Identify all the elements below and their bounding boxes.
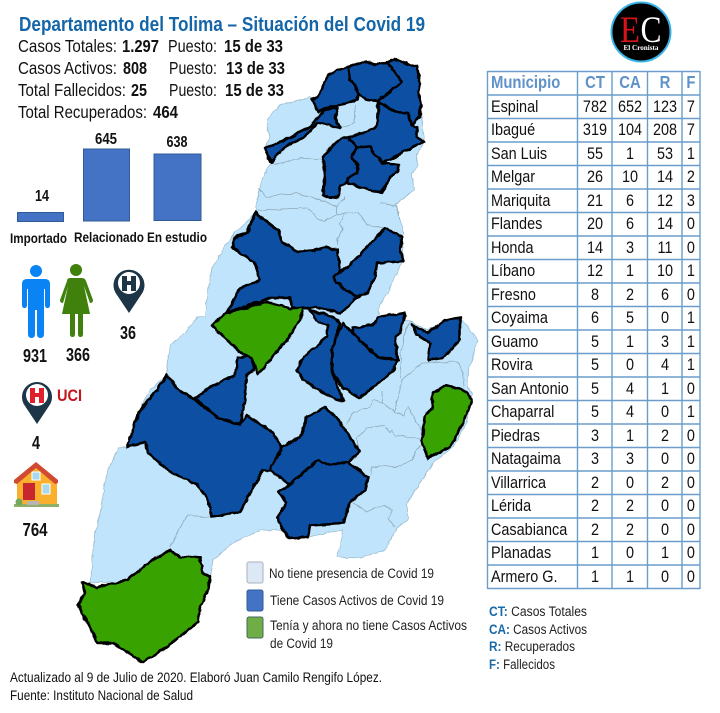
map of Tolima [78, 59, 478, 662]
district: east small [413, 317, 460, 360]
district: green east [422, 385, 472, 458]
table header: CA [619, 73, 641, 92]
table rows: 12 [587, 262, 603, 280]
table abbreviations key: R: Recuperados [489, 639, 575, 654]
table rows: 53 [657, 145, 673, 163]
table rows: 0 [687, 380, 695, 398]
table rows: 0 [687, 521, 695, 539]
table rows: 5 [591, 380, 599, 398]
table rows: Flandes [491, 215, 542, 233]
table rows: 7 [687, 121, 695, 139]
count: home care: 764 [22, 520, 48, 540]
table rows: Lérida [491, 497, 531, 515]
table rows: Melgar [491, 168, 535, 186]
table rows: 21 [587, 192, 603, 210]
summary statistics: Total Fallecidos: [18, 80, 126, 100]
footer credits [10, 670, 382, 703]
table rows: 0 [661, 450, 669, 468]
table rows: Rovira [491, 356, 533, 374]
table rows: 0 [626, 356, 634, 374]
summary statistics: Total Recuperados: [18, 102, 147, 122]
table rows: 7 [687, 98, 695, 116]
footer credits: Fuente: Instituto Nacional de Salud [10, 688, 193, 703]
table rows: Honda [491, 239, 534, 257]
district: north centre [348, 62, 402, 101]
table rows: 0 [687, 568, 695, 586]
table rows: Coyaima [491, 309, 548, 327]
table abbreviations key: CT: Casos Totales [489, 604, 587, 619]
table rows: Mariquita [491, 192, 551, 210]
summary statistics: Puesto: [169, 58, 217, 78]
table rows: 5 [591, 403, 599, 421]
table rows: 0 [661, 568, 669, 586]
table rows: 1 [626, 427, 634, 445]
table rows: 2 [687, 168, 695, 186]
table rows: 0 [687, 450, 695, 468]
map legend: de Covid 19 [270, 636, 333, 651]
bar chart: origin of cases: En estudio [147, 230, 207, 245]
table abbreviations key [489, 604, 587, 672]
count: UCI: 4 [32, 433, 40, 453]
table rows: 2 [626, 286, 634, 304]
table rows: Líbano [491, 262, 535, 280]
bar chart: origin of cases [10, 131, 207, 246]
table rows: 20 [587, 215, 603, 233]
table rows: 2 [626, 521, 634, 539]
district: cluster left [297, 310, 343, 400]
summary statistics: Casos Activos: [18, 58, 117, 78]
table abbreviations key: CA: Casos Activos [489, 622, 587, 637]
table rows: Armero G. [491, 568, 558, 586]
district: small under green [195, 355, 253, 425]
logo: El Cronista: C [640, 10, 662, 51]
table rows: 1 [626, 568, 634, 586]
table rows: 2 [591, 474, 599, 492]
table rows: 3 [626, 450, 634, 468]
table rows: 1 [687, 262, 695, 280]
district: cluster right [353, 313, 405, 360]
table rows: 1 [687, 145, 695, 163]
map base: departments without cases [90, 62, 478, 583]
district: south centre upper [270, 407, 360, 485]
table rows: 104 [618, 121, 642, 139]
table rows: 14 [587, 239, 603, 257]
table rows: Casabianca [491, 521, 567, 539]
table rows: 11 [658, 239, 673, 257]
table header: F [686, 73, 696, 92]
table rows: 5 [591, 333, 599, 351]
table rows: San Antonio [491, 380, 569, 398]
summary statistics [18, 36, 285, 122]
map legend [247, 562, 467, 651]
table rows: 2 [661, 427, 669, 445]
bar chart: origin of cases: 638 [166, 134, 188, 151]
table rows: 2 [661, 474, 669, 492]
table rows: Ibagué [491, 121, 535, 139]
table: municipalities [488, 71, 700, 589]
table rows: 0 [626, 544, 634, 562]
label: UCI: UCI [57, 386, 82, 405]
count: women: 366 [66, 345, 90, 365]
table rows: 1 [687, 309, 695, 327]
table rows: Natagaima [491, 450, 561, 468]
district: big south-west [127, 375, 282, 517]
table rows: 1 [687, 403, 695, 421]
summary statistics: 13 de 33 [226, 58, 285, 78]
table abbreviations key: F: Fallecidos [489, 657, 555, 672]
summary statistics: Puesto: [168, 36, 217, 56]
district: green south [78, 550, 210, 662]
table rows: 1 [661, 380, 669, 398]
count: hospitalised: 36 [120, 323, 136, 343]
icon: hospital pin [113, 270, 144, 313]
table rows: 208 [653, 121, 677, 139]
table rows [491, 98, 695, 586]
logo: El Cronista: E [620, 10, 640, 51]
table rows: 0 [661, 309, 669, 327]
table rows: 14 [657, 215, 673, 233]
table rows: 14 [657, 168, 673, 186]
map legend: Tiene Casos Activos de Covid 19 [270, 593, 444, 608]
summary statistics: 25 [131, 80, 147, 100]
summary statistics: 15 de 33 [225, 80, 284, 100]
summary statistics: Casos Totales: [18, 36, 117, 56]
summary statistics: 15 de 33 [224, 36, 283, 56]
district: cluster middle [332, 323, 397, 398]
table rows: 4 [626, 403, 634, 421]
table rows: 0 [661, 497, 669, 515]
table rows: Espinal [491, 98, 538, 116]
table rows: Villarrica [491, 474, 546, 492]
table header: R [660, 73, 671, 92]
table rows: 10 [622, 168, 638, 186]
table rows: 0 [687, 286, 695, 304]
bar chart: origin of cases: Importado [10, 231, 67, 246]
summary statistics: 808 [123, 58, 147, 78]
table rows: 319 [583, 121, 607, 139]
table rows: 1 [626, 262, 634, 280]
table rows: 6 [661, 286, 669, 304]
table rows: Piedras [491, 427, 540, 445]
table rows: 1 [687, 333, 695, 351]
table rows: 12 [657, 192, 673, 210]
table rows: 6 [591, 309, 599, 327]
table rows: 2 [591, 521, 599, 539]
table rows: 1 [687, 356, 695, 374]
district: north-west strip [265, 108, 340, 163]
footer credits: Actualizado al 9 de Julio de 2020. Elaboró Juan Camilo Rengifo López. [10, 670, 382, 685]
table rows: 3 [591, 450, 599, 468]
logo: El Cronista [612, 2, 670, 62]
bar chart: origin of cases: 14 [35, 188, 49, 205]
table rows: 0 [687, 497, 695, 515]
summary statistics: 464 [153, 102, 178, 122]
icon: man [22, 265, 50, 338]
internal municipality borders [170, 105, 464, 547]
bar chart: origin of cases: Relacionado [74, 230, 144, 245]
district: large central [227, 212, 357, 313]
table rows: 782 [583, 98, 607, 116]
table rows: 0 [687, 474, 695, 492]
district: north-east [378, 59, 421, 125]
map legend: Tenía y ahora no tiene Casos Activos [270, 618, 467, 633]
table rows: Planadas [491, 544, 551, 562]
table rows: 26 [587, 168, 603, 186]
table rows: 652 [618, 98, 642, 116]
table rows: 2 [591, 497, 599, 515]
table header: CT [585, 73, 605, 92]
table rows: 0 [687, 239, 695, 257]
table rows: 0 [626, 474, 634, 492]
table rows: 3 [661, 333, 669, 351]
table rows: Guamo [491, 333, 539, 351]
table rows: San Luis [491, 145, 547, 163]
district: centre-right [348, 147, 399, 193]
table rows: 1 [591, 544, 599, 562]
table rows: 0 [661, 403, 669, 421]
icon: house [14, 462, 59, 507]
district: north-west top [312, 67, 358, 112]
count: men: 931 [23, 346, 47, 366]
table rows: 123 [653, 98, 677, 116]
table rows: 3 [591, 427, 599, 445]
summary statistics: 1.297 [122, 36, 159, 56]
summary statistics: Puesto: [169, 80, 217, 100]
table header [491, 73, 696, 92]
table rows: 2 [626, 497, 634, 515]
table rows: 4 [626, 380, 634, 398]
table rows: 0 [687, 427, 695, 445]
bar chart: origin of cases: 645 [95, 131, 117, 148]
icon: UCI pin [22, 382, 52, 424]
table rows: 0 [687, 544, 695, 562]
table rows: 8 [591, 286, 599, 304]
table rows: 3 [687, 192, 695, 210]
icon: woman [60, 264, 93, 337]
table rows: 3 [626, 239, 634, 257]
table rows: Chaparral [491, 403, 554, 421]
table rows: 5 [591, 356, 599, 374]
table rows: 1 [591, 568, 599, 586]
table rows: 55 [587, 145, 603, 163]
table rows: 6 [626, 215, 634, 233]
district: right of centre [333, 228, 403, 297]
map legend: No tiene presencia de Covid 19 [269, 566, 434, 581]
table header: Municipio [491, 73, 560, 92]
title: Departamento del Tolima – Situación del Covid 19 [19, 14, 425, 36]
logo: El Cronista: El Cronista [624, 44, 659, 52]
district: east centre [348, 102, 424, 163]
district: south centre lower [277, 460, 368, 538]
table rows: 0 [661, 521, 669, 539]
table rows: 0 [687, 215, 695, 233]
table rows: 4 [661, 356, 669, 374]
table rows: 1 [661, 544, 669, 562]
table rows: 10 [657, 262, 673, 280]
table rows: 1 [626, 145, 634, 163]
district: centre-left [323, 138, 358, 198]
table rows: 5 [626, 309, 634, 327]
table rows: Fresno [491, 286, 536, 304]
table rows: 1 [626, 333, 634, 351]
district: green centre [212, 302, 303, 375]
table rows: 6 [626, 192, 634, 210]
